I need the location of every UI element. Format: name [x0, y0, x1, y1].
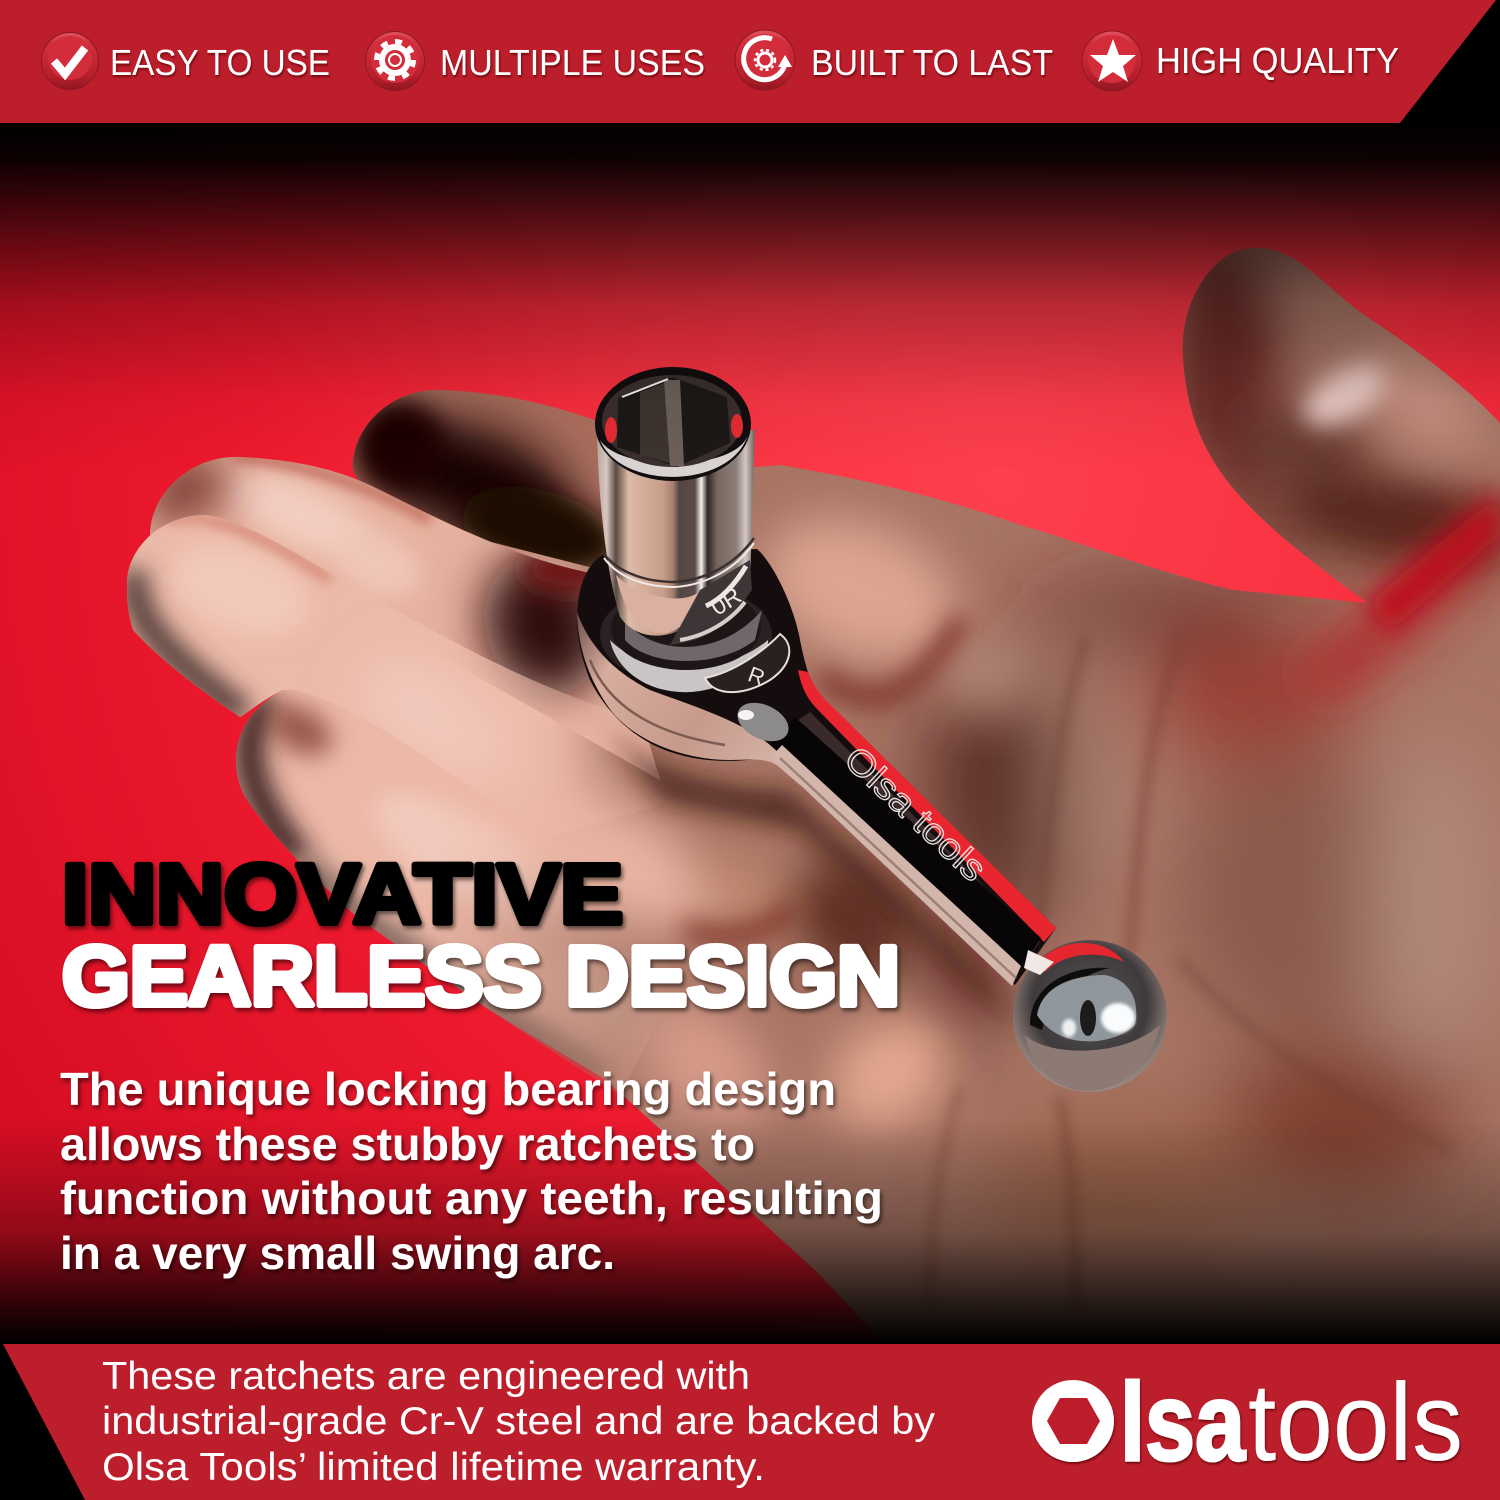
socket groove [603, 538, 754, 582]
handle black facet [770, 717, 1041, 968]
finger three [126, 515, 640, 806]
bearing highlight [731, 695, 795, 749]
handle lower silver edge [771, 745, 1021, 986]
red light on wrist [1280, 490, 1500, 700]
feature: built to last [735, 30, 1053, 90]
heading line two: GEARLESS DESIGN [62, 929, 900, 1023]
warranty text: industrial-grade Cr-V steel and are backed by [102, 1400, 936, 1443]
engraved brand on handle: Olsa tools [837, 738, 995, 889]
palm creases [930, 640, 1450, 1300]
thumb shading [1170, 246, 1500, 620]
top dark fade [0, 120, 1500, 472]
top banner [0, 0, 1500, 124]
engraved R: R [745, 661, 768, 690]
socket lower reflection [616, 575, 700, 633]
warranty text: Olsa Tools’ limited lifetime warranty. [102, 1446, 765, 1489]
bottom dark fade [0, 1120, 1500, 1350]
tool shadow [600, 720, 1020, 1030]
fingers [110, 380, 730, 1100]
icon: cycle gear badge [735, 30, 795, 90]
description text [60, 1063, 883, 1279]
label: EASY TO USE [110, 42, 330, 83]
logo: Olsatools: lsa [1120, 1361, 1246, 1484]
socket body [597, 430, 755, 636]
handle mid facet [795, 712, 1040, 955]
icon: check badge [42, 32, 98, 90]
handle red reflection [798, 670, 1056, 942]
palm and thumb [298, 248, 1500, 1329]
socket rim [595, 367, 751, 481]
icon: gear badge [366, 32, 424, 90]
skin under finger blends [280, 560, 580, 880]
finger four [236, 690, 644, 1093]
warranty text [102, 1355, 936, 1489]
logo: Olsatools [1032, 1361, 1463, 1484]
icon: star badge [1082, 31, 1142, 91]
socket red reflections [605, 417, 617, 443]
feature: high quality [1082, 31, 1399, 91]
ratchet tool [577, 367, 1167, 1092]
thumb fingerprint highlight [1293, 351, 1397, 439]
feature: easy to use [42, 32, 330, 90]
heading line one: INNOVATIVE [62, 847, 623, 941]
feature: multiple uses [366, 32, 705, 90]
description text: in a very small swing arc. [60, 1227, 615, 1279]
description text: function without any teeth, resulting [60, 1172, 883, 1224]
logo: Olsatools: tools [1248, 1361, 1463, 1484]
deep palm creases [690, 625, 958, 936]
shadowed finger [352, 390, 607, 568]
head flange rings [600, 585, 772, 685]
head silver lower edge [577, 612, 800, 785]
description text: The unique locking bearing design [60, 1063, 836, 1115]
warranty text: These ratchets are engineered with [102, 1355, 750, 1398]
bottom banner [0, 1340, 1500, 1500]
black base [0, 1340, 1500, 1500]
banner background [3, 1344, 1500, 1500]
logo: Olsatools: O [1036, 1361, 1110, 1484]
ratchet head dark body [577, 549, 1056, 985]
description text: allows these stubby ratchets to [60, 1118, 755, 1170]
banner background [0, 0, 1496, 123]
label: HIGH QUALITY [1156, 40, 1399, 81]
hexagonal socket opening [617, 377, 730, 467]
head direction mark [705, 634, 789, 692]
label: MULTIPLE USES [440, 42, 705, 83]
socket chrome lower right [670, 560, 752, 645]
ball end [1013, 940, 1167, 1092]
label: BUILT TO LAST [811, 42, 1053, 83]
socket size marking: 0R [706, 582, 746, 621]
heading [62, 847, 900, 1023]
head edge line [590, 660, 725, 745]
palm light and shade [902, 589, 1490, 1250]
black corner [1380, 0, 1500, 124]
finger two [150, 456, 660, 780]
